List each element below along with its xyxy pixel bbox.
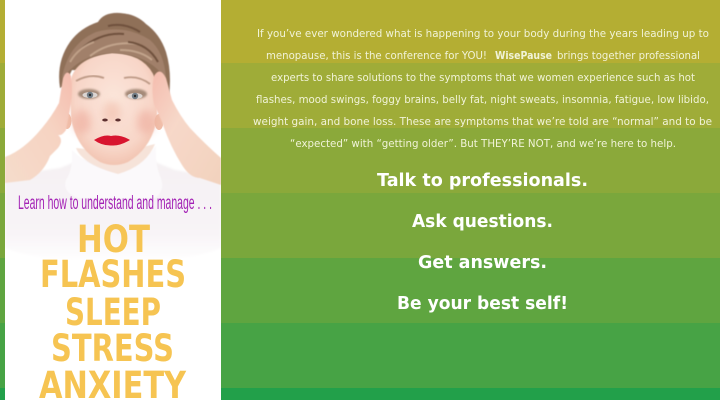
text block: conference description: “expected” with “getting older”. But THEY’RE NOT, and we’re here to help. (290, 139, 676, 150)
heading: symptom list (39, 218, 187, 400)
ear right (154, 114, 164, 130)
subheading: Learn how to understand and manage . . . (18, 193, 212, 214)
nose (102, 101, 121, 123)
eye right (125, 89, 147, 99)
cheek blush left (73, 110, 91, 134)
turtleneck collar (96, 168, 97, 169)
lips (94, 136, 130, 146)
line: talk to professionals: Talk to professionals. (377, 171, 588, 191)
word: stress: STRESS (51, 327, 174, 370)
text block: conference description: experts to share solutions to the symptoms that we women experience such as hot (271, 73, 695, 84)
text block: conference description: If you’ve ever wondered what is happening to your body during the years leading up to (257, 29, 709, 40)
right hand (152, 71, 221, 185)
face (70, 53, 157, 165)
line: be your best self: Be your best self! (397, 294, 568, 314)
text block: conference description: brings together professional (557, 51, 700, 62)
sweater (6, 164, 220, 240)
eyebrow left (76, 76, 104, 81)
text block: conference description: WisePause (495, 51, 552, 62)
hair mass (59, 13, 170, 96)
cheek blush right (137, 110, 155, 134)
word: sleep: SLEEP (65, 291, 161, 334)
ear left (66, 114, 72, 129)
panel: left white photo column (5, 0, 221, 400)
text block: conference description: weight gain, and bone loss. These are symptoms that we’re told are “normal” and to be (253, 117, 712, 128)
call to action lines (377, 171, 588, 314)
hair strands (70, 25, 158, 62)
line: get answers: Get answers. (418, 253, 547, 273)
word: flashes: FLASHES (40, 253, 186, 296)
text block: conference description: menopause, this is the conference for YOU! (266, 51, 487, 62)
eyebrow right (124, 77, 150, 84)
text block: conference description (253, 29, 712, 150)
text block: conference description: flashes, mood swings, foggy brains, belly fat, night sweats, insomnia, fatigue, low libido, (256, 95, 709, 106)
neck shadow (76, 144, 155, 174)
left hand (5, 72, 72, 183)
line: ask questions: Ask questions. (412, 212, 553, 232)
photo: stressed woman holding her temples (5, 13, 221, 262)
eye left (78, 89, 100, 99)
word: hot: HOT (77, 218, 151, 261)
hair fringe (62, 29, 166, 78)
